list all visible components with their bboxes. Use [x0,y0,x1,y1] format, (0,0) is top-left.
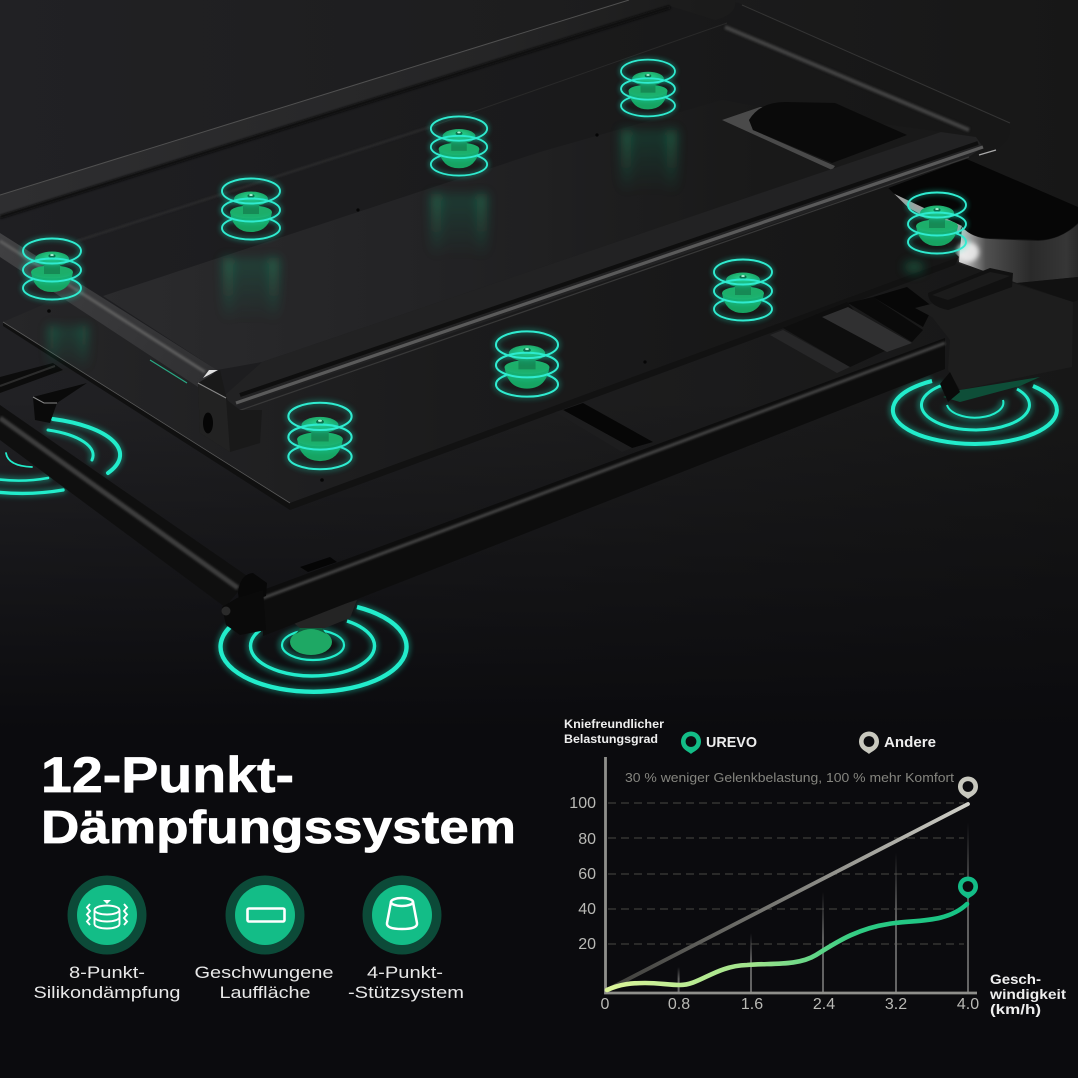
upper glass deck [0,2,1011,405]
marker: UREVO [958,876,978,899]
legend: UREVO [681,732,757,754]
silicone damper 3 [431,116,487,176]
rear window and bezel [876,157,1078,283]
y axis ticks [569,795,596,953]
grid lines [608,803,964,944]
silicone damper 4 [621,60,675,116]
silicone damper 6 [714,260,772,320]
silicone damper 1 [23,238,81,300]
icon label: curved running surface [194,963,334,1002]
title: 12-Punkt- [41,747,294,803]
left frame bar [0,405,250,607]
x axis title: windigkeit [989,986,1066,1002]
chart caption: 30 % weniger Gelenkbelastung, 100 % mehr Komfort [625,770,954,785]
title: Dämpfungssystem [41,801,516,853]
silicone damper 5 [908,192,966,254]
icon label: curved running surface: Geschwungene [194,963,334,982]
x axis ticks: 0.8 [668,996,690,1013]
vertical guide lines [678,823,969,993]
right foot housing [915,268,1078,402]
silicone damper 7 [496,331,558,397]
silicone damper 2 [222,178,280,240]
icon label: silicone damping [34,963,180,1002]
x axis ticks: 0 [601,996,610,1013]
icon: curved running surface [226,876,304,954]
x axis ticks: 2.4 [813,996,835,1013]
x axis ticks: 4.0 [957,996,979,1013]
front frame bar [263,338,945,636]
x axis ticks: 1.6 [741,996,763,1013]
lower deck plate [3,180,959,510]
right foot rings [893,381,1057,444]
lower frame slots [555,287,933,452]
frame corner joint [222,573,267,635]
y axis title [564,719,665,746]
y axis ticks: 100 [569,795,596,812]
deck window [722,102,907,170]
legend: others: Andere [884,734,936,751]
y axis ticks: 40 [578,901,596,918]
x axis title: Gesch- [990,971,1041,987]
bottom foot rings [221,607,407,692]
silicone damper 8 [288,403,352,469]
y axis ticks: 80 [578,831,596,848]
title [41,747,516,853]
lower frame slot [300,557,337,572]
right deck rail [725,5,1010,155]
icon label: support foot: 4-Punkt- [367,963,443,982]
legend: others [859,732,936,754]
axes [606,757,977,993]
icon: support foot [362,876,442,954]
left foot rings [0,419,120,493]
marker: others [958,776,978,799]
y axis title: Kniefreundlicher [564,719,665,731]
icon: silicone damping [68,876,146,954]
line chart [569,757,979,1013]
line: UREVO [607,904,967,990]
left deck rail [0,233,217,387]
y axis title: Belastungsgrad [564,734,658,746]
line: others [607,804,968,990]
x axis ticks: 3.2 [885,996,907,1013]
x axis title [989,971,1066,1017]
icon label: curved running surface: Lauffläche [220,983,310,1002]
bottom foot body [290,600,357,655]
x axis ticks [601,996,979,1013]
y axis ticks: 20 [578,936,596,953]
icon label: support foot [348,963,464,1002]
legend: UREVO: UREVO [706,734,757,751]
icon label: silicone damping: Silikondämpfung [34,983,180,1002]
rear rail [0,0,735,217]
icon label: silicone damping: 8-Punkt- [69,963,145,982]
corner block with port [198,370,262,452]
icon label: support foot: -Stützsystem [348,983,464,1002]
front deck rail [225,132,983,411]
y axis ticks: 60 [578,866,596,883]
left bracket leg [33,383,87,423]
treadmill illustration [0,0,1078,692]
green reflections on deck [48,130,924,369]
left side rail and bracket [0,363,63,393]
x axis title: (km/h) [990,1001,1041,1017]
